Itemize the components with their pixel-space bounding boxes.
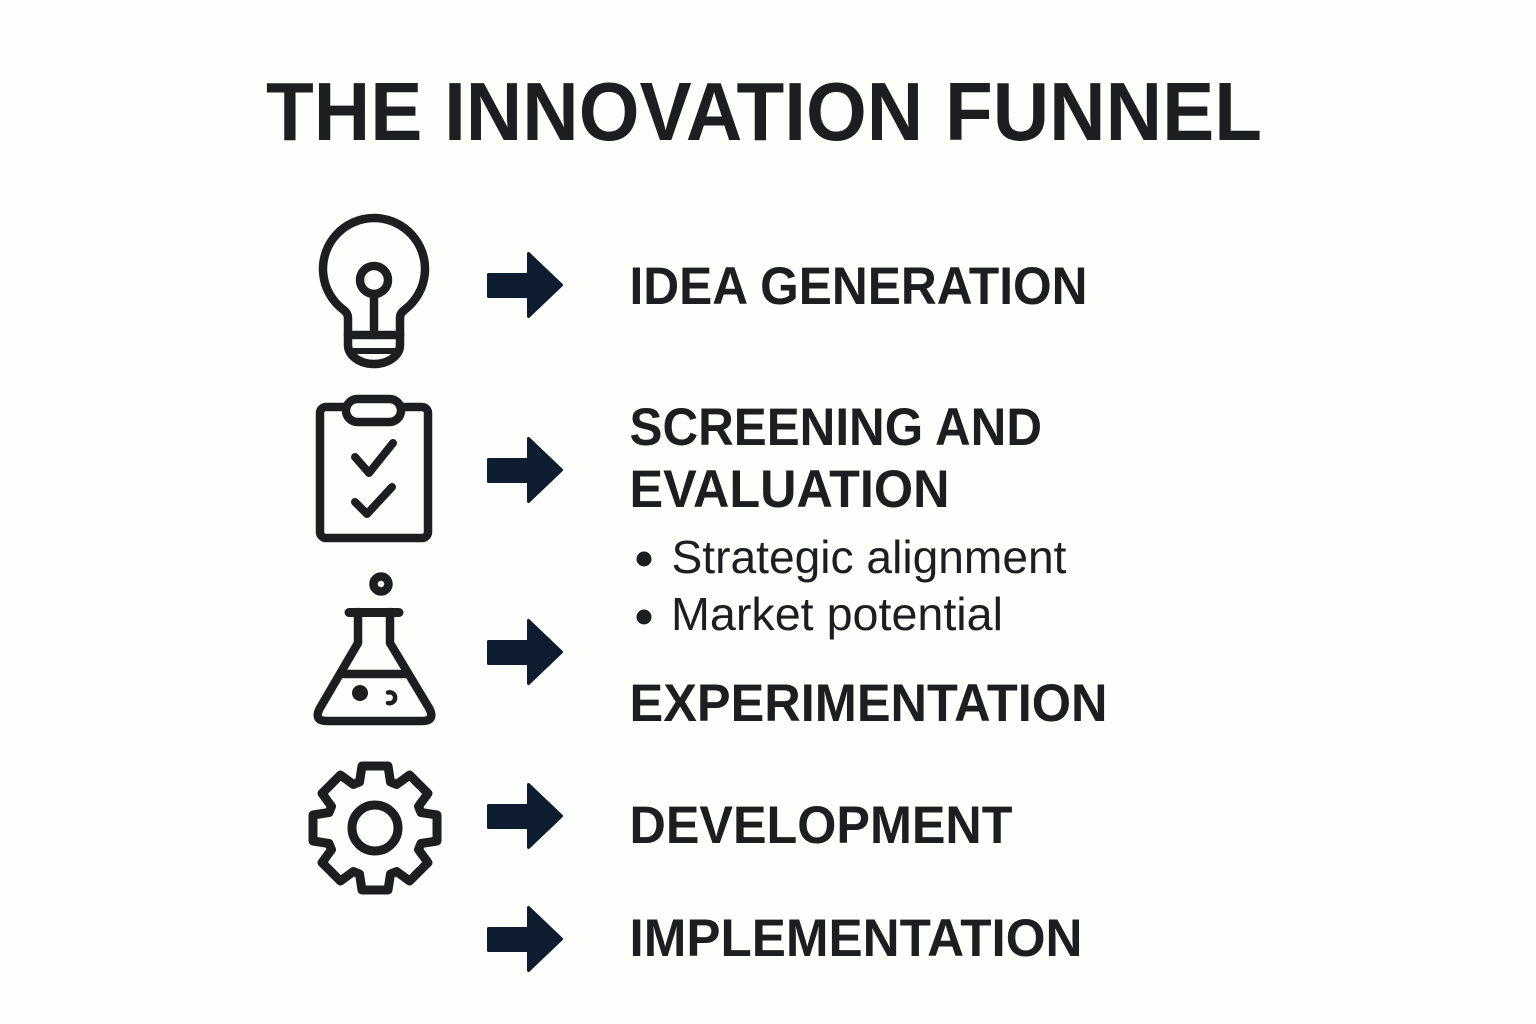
arrow: idea generation (488, 254, 562, 316)
bullet list: screening criteria (636, 531, 1067, 640)
label: screening and evaluation: SCREENING AND (630, 398, 1042, 457)
arrow: screening and evaluation (488, 438, 562, 502)
arrow: implementation (488, 908, 562, 970)
label: idea generation: IDEA GENERATION (630, 257, 1088, 316)
label: development: DEVELOPMENT (630, 796, 1012, 855)
label: screening and evaluation: EVALUATION (630, 460, 950, 519)
label: screening and evaluation (630, 398, 1042, 519)
label: implementation: IMPLEMENTATION (630, 909, 1082, 968)
icon: gear (313, 766, 437, 890)
label: experimentation: EXPERIMENTATION (630, 674, 1108, 733)
bullet list: screening criteria: Strategic alignment (672, 531, 1067, 583)
icon: clipboard with checks (320, 399, 428, 538)
arrow: development (488, 784, 562, 848)
bullet list: screening criteria: Market potential (671, 588, 1003, 640)
arrow: experimentation (488, 620, 562, 684)
icon: light bulb (323, 218, 425, 364)
icon: flask (318, 576, 431, 721)
title: THE INNOVATION FUNNEL (266, 65, 1262, 158)
